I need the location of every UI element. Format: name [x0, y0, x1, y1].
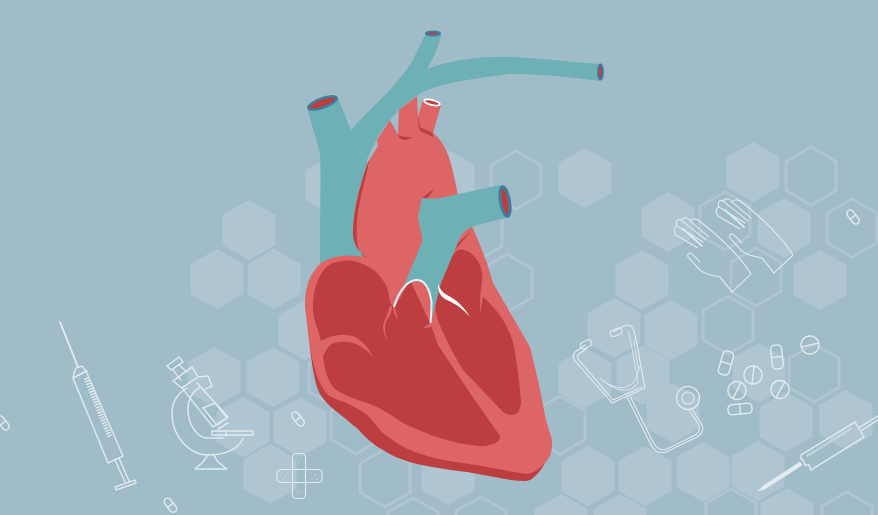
vessel: superior vena cava and branches — [307, 35, 600, 270]
heart: arterial opening — [424, 98, 440, 107]
valve: white arc — [394, 280, 432, 323]
chamber: left ventricle and left atrium — [435, 250, 521, 415]
filled hexagon pattern — [188, 142, 872, 515]
icon: pills small — [0, 209, 861, 514]
valve: white strand — [438, 284, 470, 317]
heart: shadows on arteries — [398, 117, 472, 250]
heart: left shadow edge — [353, 161, 369, 258]
icon: microscope — [167, 357, 253, 469]
icon: gloves — [674, 199, 793, 292]
icon: syringe left — [60, 322, 136, 490]
vessel opening: pulmonary trunk — [498, 186, 512, 217]
crescent wall in right ventricle — [321, 335, 373, 357]
icon: bandage — [277, 454, 322, 498]
icon: pills group — [717, 336, 819, 415]
chamber: right atrium and right ventricle — [313, 260, 500, 446]
vessel openings: superior vessels — [307, 32, 603, 112]
icon: syringe right — [758, 416, 878, 491]
papillary strands — [383, 306, 398, 342]
heart illustration — [305, 32, 603, 481]
icon: stethoscope — [573, 325, 703, 453]
heart: outer shadow layer — [310, 350, 549, 481]
heart: aorta and pulmonary artery — [305, 96, 552, 474]
outlined hexagon pattern — [309, 147, 877, 515]
vessel: pulmonary trunk — [394, 185, 510, 318]
